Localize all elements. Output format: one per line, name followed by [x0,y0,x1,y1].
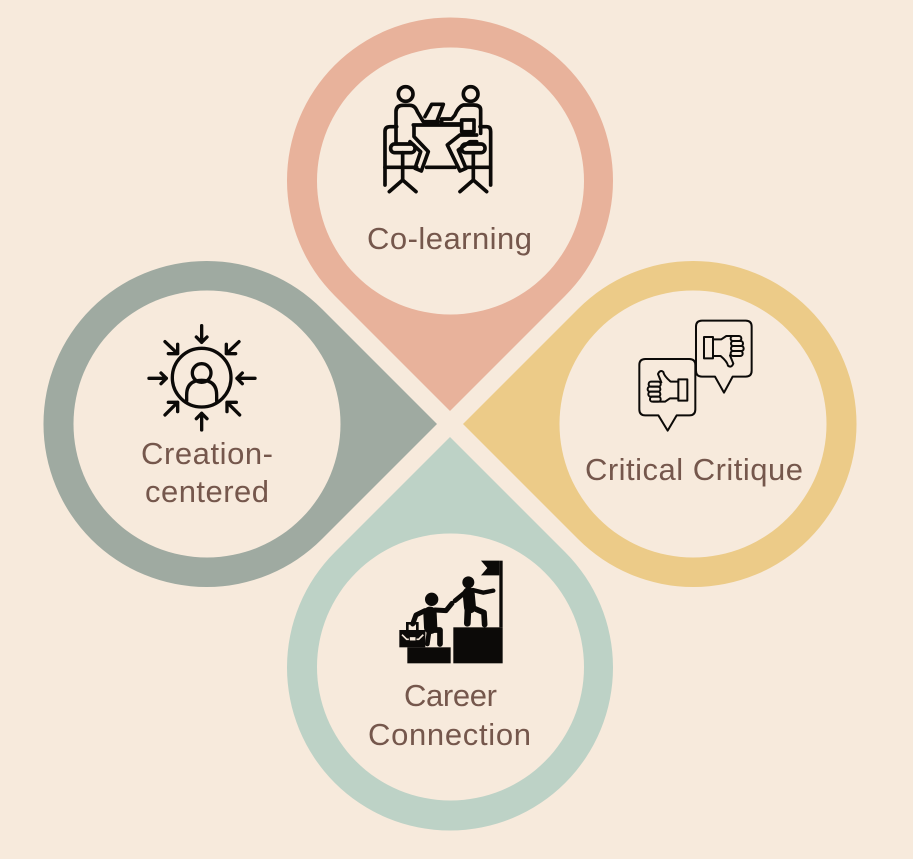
label: creation-centered: Creation- [141,436,273,471]
label: career connection: Connection [368,717,531,752]
panel: career connection [287,437,613,831]
icon: person with inward arrows [149,326,255,430]
label: co-learning: Co-learning [367,221,532,256]
label: career connection: Career [404,678,497,713]
label: critical critique: Critical Critique [585,452,803,487]
panel: co-learning [287,17,613,411]
panel: critical critique [463,261,857,587]
label: career connection [368,678,531,752]
icon: two people at a table [385,87,491,192]
panel: creation-centered [43,261,437,587]
icon: thumbs speech bubbles [639,321,752,431]
label: creation-centered: centered [145,474,269,509]
icon: climbing steps with flag [399,561,503,663]
label: creation-centered [141,436,273,509]
